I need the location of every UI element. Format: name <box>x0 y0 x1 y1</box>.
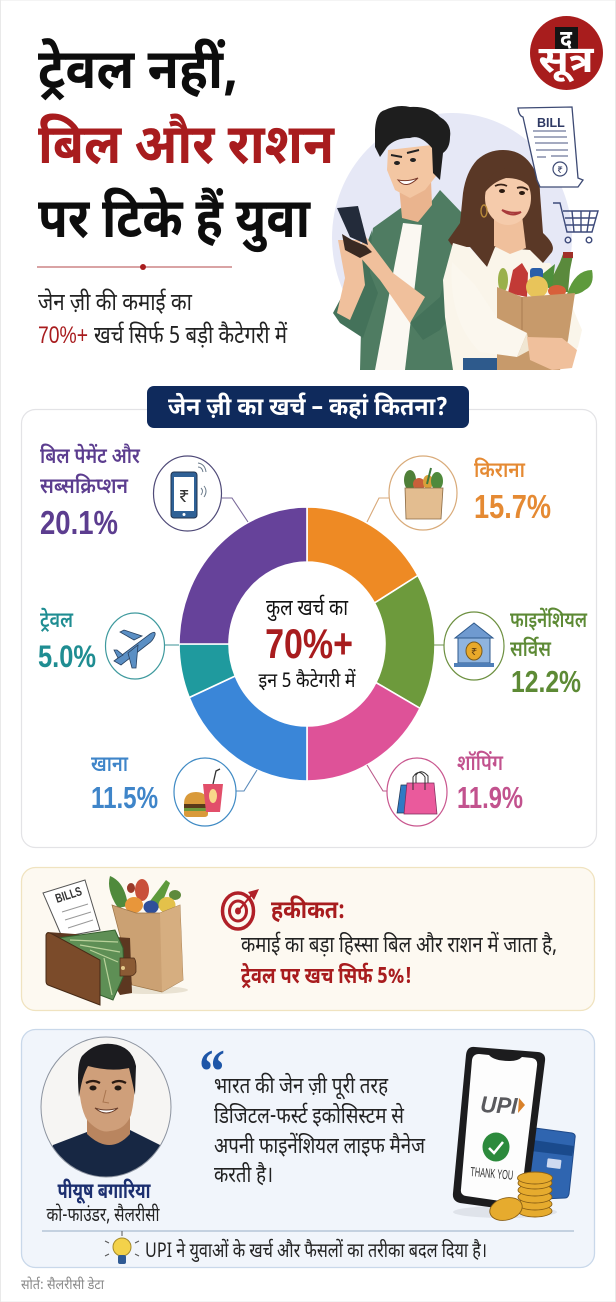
label: food: खाना <box>91 753 128 781</box>
callout heading: हकीकत: <box>271 895 345 929</box>
callout text: ट्रेवल पर खच सिर्फ 5%! <box>241 962 412 993</box>
paper <box>43 880 100 937</box>
icon: grocery bag <box>389 456 457 530</box>
portrait: Piyush Bagaria <box>40 1037 172 1180</box>
icon: light bulb <box>105 1231 139 1264</box>
callout text <box>241 930 557 993</box>
segment: bills and subscriptions 20.1% <box>179 507 307 644</box>
quote text: भारत की जेन ज़ी पूरी तरह <box>214 1072 389 1103</box>
man torso <box>360 190 464 370</box>
man far sleeve and forearm <box>333 230 378 338</box>
person name and role: को-फाउंडर, सैलरीसी <box>46 1203 160 1230</box>
logo: द सूत्र: सूत्र <box>538 38 595 87</box>
wallet back <box>47 932 132 995</box>
section heading banner: जेन ज़ी का खर्च – कहां कितना? <box>168 391 448 426</box>
donut centre text: कुल खर्च का <box>266 594 348 625</box>
subtitle: खर्च सिर्फ 5 बड़ी कैटेगरी में <box>94 320 288 354</box>
label: grocery <box>474 459 551 526</box>
label: financial services: फाइनेंशियल <box>510 607 588 637</box>
label: grocery: किराना <box>474 459 525 487</box>
label: travel: 5.0% <box>38 640 96 675</box>
subtitle: 70%+ <box>38 321 88 348</box>
title: पर टिके हैं युवा <box>38 186 311 260</box>
icon: target <box>222 889 259 929</box>
person name and role <box>46 1180 160 1230</box>
quote text: अपनी फाइनेंशियल लाइफ मैनेज <box>214 1131 425 1163</box>
icon: phone payment <box>154 456 222 531</box>
section heading banner <box>147 386 469 428</box>
grocery bag <box>497 287 575 370</box>
label: bills and subscriptions: बिल पेमेंट और <box>40 443 140 473</box>
segment: financial services 12.2% <box>374 576 435 708</box>
label: financial services <box>510 607 588 699</box>
illustration: UPI phone, card and coins <box>453 1047 575 1224</box>
illustration: wallet, bills and grocery bag: BILLS <box>53 883 84 906</box>
segment: shopping 11.9% <box>307 682 420 781</box>
illustration: UPI phone, card and coins: THANK YOU <box>470 1164 514 1183</box>
woman hair back <box>448 150 553 267</box>
icon: shopping cart <box>553 203 598 243</box>
source note: सोर्त: सैलरीसी डेटा <box>21 1276 105 1295</box>
man neck and face <box>399 180 432 222</box>
phone <box>337 206 368 245</box>
quote panel footer divider <box>42 1230 574 1232</box>
connector lines <box>164 498 444 791</box>
title: बिल और राशन <box>38 113 335 186</box>
panel: quote <box>22 1030 594 1268</box>
icon: bill receipt: BILL <box>537 116 565 130</box>
donut centre text <box>258 594 356 696</box>
icon: bill receipt: ₹ <box>557 165 563 178</box>
donut centre text: 70%+ <box>265 622 353 668</box>
icon: phone payment: ₹ <box>179 485 189 510</box>
icon: bill receipt <box>518 107 583 187</box>
title: ट्रेवल नहीं, <box>38 37 238 111</box>
segment: grocery 15.7% <box>307 507 418 603</box>
segment: food 11.5% <box>189 676 307 781</box>
icon: burger and drink <box>174 758 236 826</box>
panel: reality callout <box>22 868 594 1010</box>
donut chart <box>179 507 435 781</box>
man hair <box>375 106 450 180</box>
icon: bank <box>444 612 504 680</box>
bag <box>112 905 183 992</box>
segment: travel 5.0% <box>179 644 235 698</box>
quote text <box>214 1072 425 1192</box>
quote text: डिजिटल-फर्स्ट इकोसिस्टम से <box>214 1102 405 1133</box>
woman arm and hand <box>497 318 527 357</box>
logo: द सूत्र: द <box>560 27 572 58</box>
illustration: wallet, bills and grocery bag <box>43 876 188 1005</box>
label: bills and subscriptions: सब्सक्रिप्शन <box>40 475 129 503</box>
grocery contents <box>567 270 593 294</box>
wallet front <box>46 933 100 1005</box>
strap <box>120 958 136 976</box>
title divider <box>37 264 232 270</box>
donut centre text: इन 5 कैटेगरी में <box>258 667 356 696</box>
quote text: करती है। <box>214 1160 273 1192</box>
label: shopping: 11.9% <box>457 781 523 815</box>
subtitle <box>38 287 288 354</box>
man near sleeve and forearm <box>410 287 446 340</box>
quote mark: “ <box>199 1038 225 1106</box>
cash <box>58 930 124 1000</box>
label: bills and subscriptions: 20.1% <box>40 504 118 542</box>
icon: bank: ₹ <box>471 646 477 660</box>
vegetables <box>109 876 128 908</box>
coins <box>487 1172 552 1224</box>
label: grocery: 15.7% <box>474 488 551 526</box>
woman neck and face <box>494 219 526 254</box>
label: travel: ट्रेवल <box>40 607 74 637</box>
label: bills and subscriptions <box>40 443 140 542</box>
woman sweater <box>443 243 582 370</box>
panel: spending breakdown <box>22 410 596 848</box>
footer takeaway: UPI ने युवाओं के खर्च और फैसलों का तरीका बदल दिया है। <box>145 1237 487 1266</box>
label: travel <box>38 607 96 675</box>
callout text: कमाई का बड़ा हिस्सा बिल और राशन में जाता है, <box>241 930 557 962</box>
subtitle: जेन ज़ी की कमाई का <box>38 287 193 321</box>
person name and role: पीयूष बगारिया <box>58 1180 151 1208</box>
title <box>38 37 335 260</box>
label: shopping <box>457 750 523 815</box>
icon: airplane <box>106 613 164 679</box>
label: food: 11.5% <box>91 781 158 815</box>
label: financial services: 12.2% <box>511 665 581 699</box>
logo: द सूत्र <box>530 16 603 90</box>
illustration: UPI phone, card and coins: UPI <box>480 1091 519 1119</box>
label: shopping: शॉपिंग <box>457 750 504 780</box>
icon: shopping bags <box>387 758 447 826</box>
label: financial services: सर्विस <box>510 636 552 666</box>
label: food <box>91 753 158 815</box>
hero illustration: young man and woman <box>332 106 593 372</box>
